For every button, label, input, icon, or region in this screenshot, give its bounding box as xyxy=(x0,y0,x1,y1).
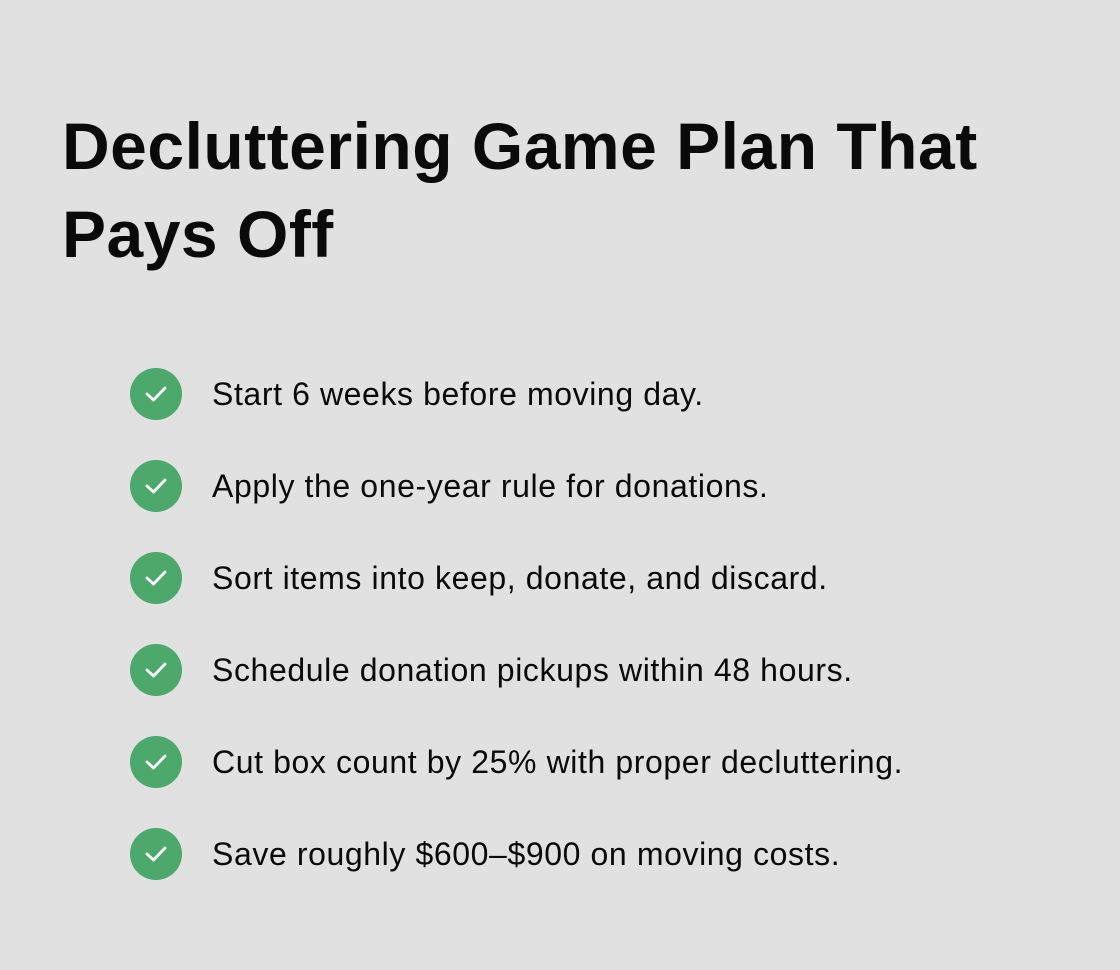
item 4: Schedule donation pickups within 48 hours. xyxy=(212,652,853,688)
item 1: Start 6 weeks before moving day. xyxy=(212,376,704,412)
item 5 xyxy=(130,736,903,788)
item 1 xyxy=(130,368,704,420)
item 6 xyxy=(130,828,840,880)
item 6: Save roughly $600–$900 on moving costs. xyxy=(212,836,840,872)
title: Pays Off xyxy=(62,197,334,271)
title xyxy=(62,109,978,271)
item 2 xyxy=(130,460,768,512)
title: Decluttering Game Plan That xyxy=(62,109,978,183)
item 3 xyxy=(130,552,828,604)
item 5: Cut box count by 25% with proper decluttering. xyxy=(212,744,903,780)
item 3: Sort items into keep, donate, and discard. xyxy=(212,560,828,596)
item 4 xyxy=(130,644,853,696)
checklist xyxy=(130,368,903,880)
item 2: Apply the one-year rule for donations. xyxy=(212,468,768,504)
